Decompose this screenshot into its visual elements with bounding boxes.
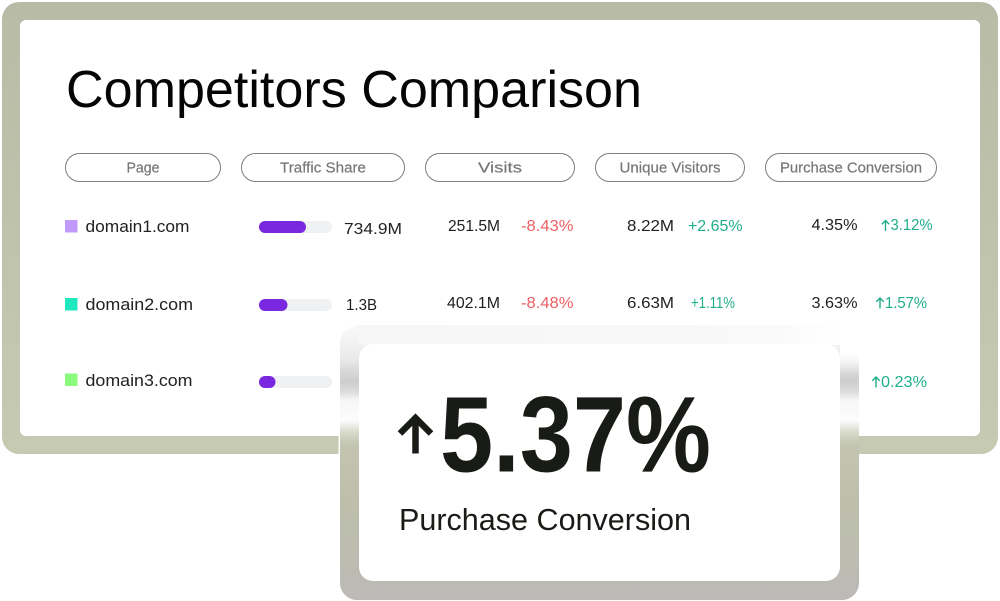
visits: 402.1M	[447, 295, 500, 312]
card halo gap	[338, 400, 340, 456]
header: Purchase Conversion: Purchase Conversion	[780, 160, 922, 176]
unique visitors: 8.22M	[627, 218, 674, 235]
panel surface	[20, 20, 980, 436]
icon: up arrow	[400, 418, 431, 454]
conversion: 3.63%	[812, 295, 858, 312]
legend square	[65, 374, 78, 386]
header: Visits	[426, 154, 574, 182]
header: Purchase Conversion	[766, 154, 936, 182]
conversion change: 3.12%	[890, 217, 932, 234]
traffic bar	[259, 376, 332, 388]
panel frame	[2, 2, 998, 454]
traffic bar	[259, 299, 332, 311]
row: domain2.com	[65, 295, 927, 314]
domain name: domain2.com	[86, 295, 193, 314]
visits change: -8.43%	[521, 218, 574, 235]
visits: 251.5M	[448, 218, 500, 235]
card frame top fade	[358, 325, 860, 345]
row: domain3.com	[65, 371, 927, 391]
row: domain1.com	[65, 217, 932, 238]
table header pills	[66, 154, 936, 182]
card surface	[359, 344, 840, 581]
domain name: domain1.com	[86, 217, 190, 236]
header: Traffic Share: Traffic Share	[280, 160, 366, 176]
conversion change: 1.57%	[885, 295, 927, 312]
card label: Purchase Conversion	[399, 502, 691, 537]
card frame right fade	[840, 344, 860, 374]
traffic bar	[259, 221, 332, 233]
title: Competitors Comparison	[66, 61, 642, 119]
traffic value: 734.9M	[344, 221, 402, 238]
header: Visits: Visits	[478, 160, 522, 176]
big number: 5.37%	[440, 374, 711, 494]
unique change: +2.65%	[688, 218, 742, 235]
traffic value: 1.3B	[346, 297, 377, 314]
legend square	[65, 298, 78, 310]
conversion change: 0.23%	[881, 374, 927, 391]
visits change: -8.48%	[521, 295, 574, 312]
header: Page: Page	[126, 160, 160, 176]
header: Unique Visitors: Unique Visitors	[620, 160, 720, 176]
unique change: +1.11%	[691, 295, 735, 312]
panel: competitors table	[2, 2, 998, 454]
header: Traffic Share	[242, 154, 404, 182]
callout card: purchase conversion	[338, 325, 860, 600]
conversion: 4.35%	[812, 217, 858, 234]
header: Page	[66, 154, 220, 182]
domain name: domain3.com	[86, 371, 192, 390]
legend square	[65, 220, 78, 232]
card frame	[340, 326, 859, 600]
header: Unique Visitors	[596, 154, 744, 182]
unique visitors: 6.63M	[627, 295, 674, 312]
